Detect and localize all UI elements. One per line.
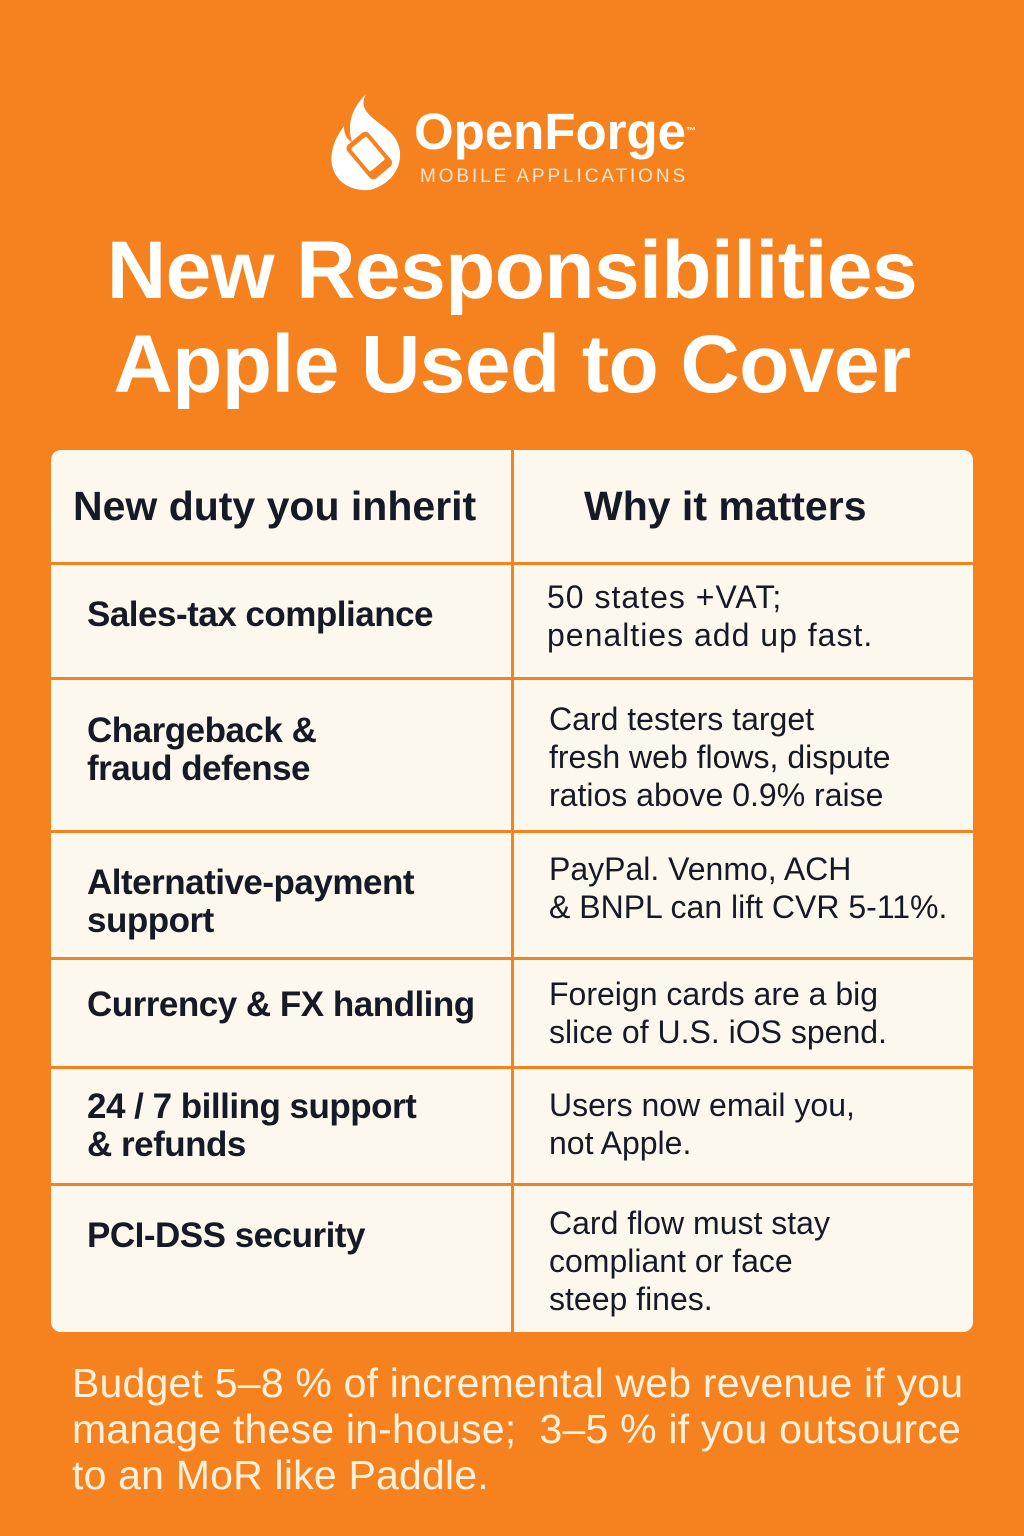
footer note: Budget 5–8 % of incremental web revenue if you	[72, 1360, 963, 1406]
table: not Apple.	[549, 1125, 691, 1161]
footer note: manage these in-house; 3–5 % if you outsource	[72, 1406, 961, 1452]
table: Foreign cards are a big	[549, 976, 878, 1012]
footer note	[72, 1360, 963, 1498]
tagline: MOBILE APPLICATIONS	[420, 166, 688, 187]
table: ratios above 0.9% raise	[549, 777, 883, 813]
header: left: New duty you inherit	[73, 483, 476, 529]
brand name: OpenForge™	[414, 103, 696, 160]
title	[107, 225, 917, 410]
table: steep fines.	[549, 1281, 713, 1317]
table: Users now email you,	[549, 1087, 855, 1123]
row 5: 24 / 7 billing support	[87, 1087, 416, 1126]
row 6: PCI-DSS security	[87, 1216, 365, 1255]
table: & BNPL can lift CVR 5-11%.	[549, 889, 947, 925]
row 2	[87, 711, 316, 788]
table: penalties add up fast.	[547, 617, 873, 653]
table: Card testers target	[549, 701, 814, 737]
title: New Responsibilities	[107, 225, 917, 316]
footer note: to an MoR like Paddle.	[72, 1452, 489, 1498]
table: fresh web flows, dispute	[549, 739, 890, 775]
logo	[331, 94, 696, 190]
icon: flame with phone	[331, 94, 400, 190]
table: compliant or face	[549, 1243, 793, 1279]
table	[51, 450, 973, 1332]
row 3	[87, 863, 414, 940]
row 5: & refunds	[87, 1125, 246, 1164]
table: 50 states +VAT;	[547, 579, 782, 615]
row 5	[87, 1087, 416, 1164]
row 2: Chargeback &	[87, 711, 316, 750]
row 3: Alternative-payment	[87, 863, 414, 902]
table: Card flow must stay	[549, 1205, 830, 1241]
title: Apple Used to Cover	[114, 319, 910, 410]
row 3: support	[87, 901, 214, 940]
header: right: Why it matters	[584, 483, 866, 529]
row 2: fraud defense	[87, 749, 310, 788]
row 4: Currency & FX handling	[87, 985, 475, 1024]
table: PayPal. Venmo, ACH	[549, 851, 851, 887]
row 1: Sales-tax compliance	[87, 595, 433, 634]
table: slice of U.S. iOS spend.	[549, 1014, 887, 1050]
